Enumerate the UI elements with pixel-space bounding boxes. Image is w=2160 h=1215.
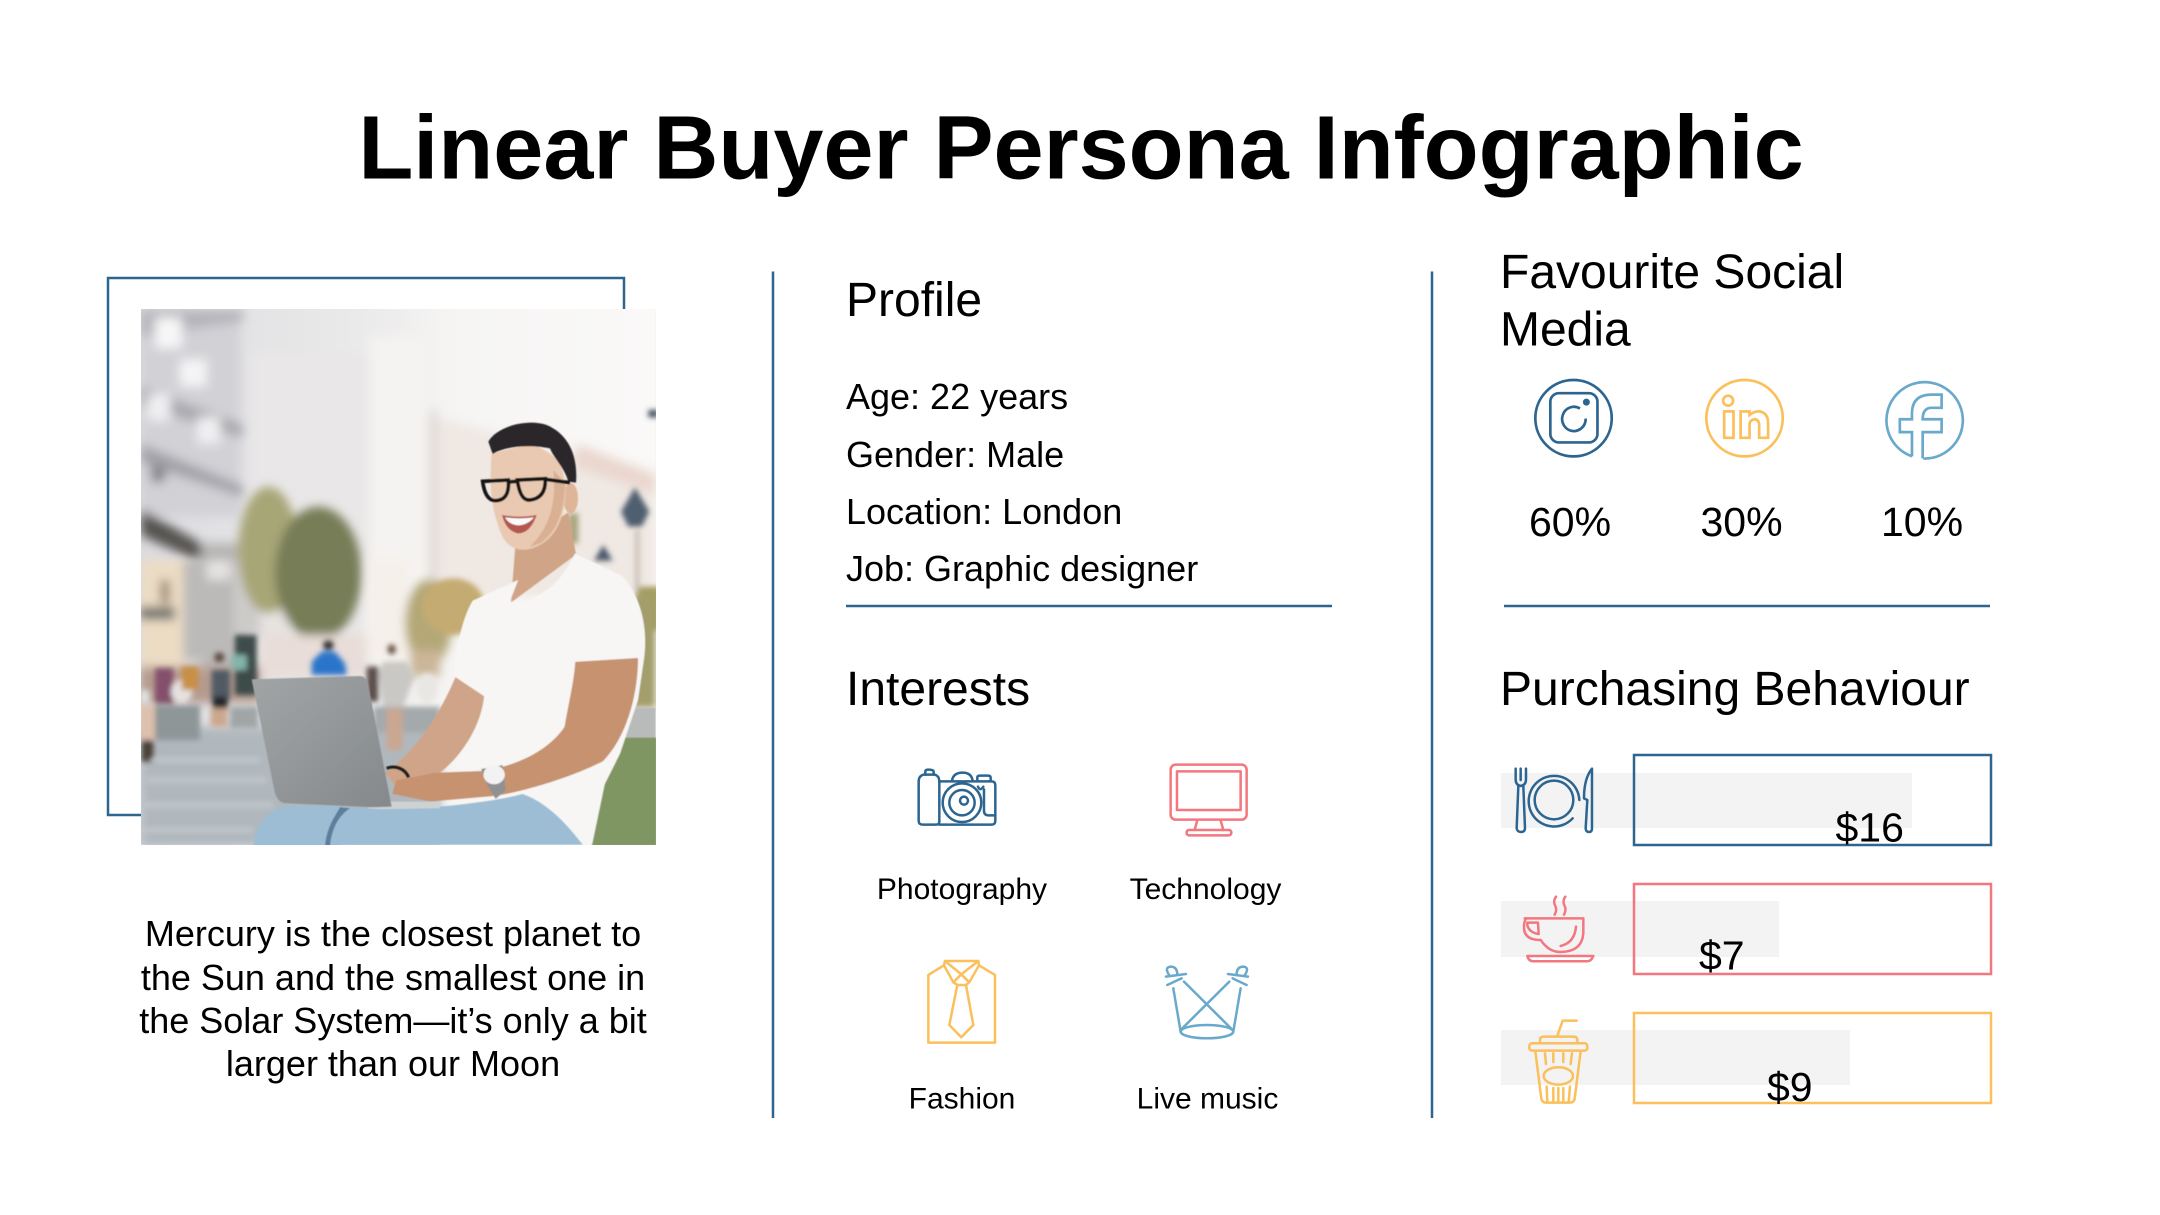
shirt [454,554,645,845]
man head [483,423,578,550]
social media icons [1535,380,1963,459]
icon: takeaway drink [1529,1021,1587,1103]
persona description: larger than our Moon [226,1043,560,1084]
persona description: Mercury is the closest planet to [145,913,641,954]
photo lower street scene [140,487,452,847]
icon: coffee cup [1524,897,1593,961]
title: Linear Buyer Persona Infographic [358,98,1804,198]
icon: linkedin [1706,380,1783,456]
purchasing values: $16 [1836,804,1904,850]
icon: stage lights [1166,967,1248,1038]
icon: instagram [1535,380,1612,456]
photo frame [108,278,624,815]
social media percentages: 60% [1529,499,1611,545]
persona description: the Sun and the smallest one in [141,957,645,998]
icon: monitor [1171,765,1247,835]
watch [481,765,506,799]
purchasing heading: Purchasing Behaviour [1500,663,1970,716]
persona description: the Solar System—it’s only a bit [139,1000,647,1041]
bar: drink [1501,1030,1850,1085]
interests labels: Live music [1137,1082,1278,1116]
profile details: Age: 22 years [846,376,1068,417]
interests labels [877,873,1281,1116]
interests heading: Interests [846,663,1030,716]
profile details: Job: Graphic designer [846,548,1198,589]
persona photo [140,309,660,847]
social media percentages: 10% [1881,499,1963,545]
man body [331,513,656,846]
interests icons [919,765,1248,1043]
near leg [331,794,583,845]
icon: camera [919,770,995,825]
divider right [1431,272,1433,1118]
divider left [772,272,774,1118]
purchasing icons [1516,769,1593,1103]
neck [511,513,576,603]
profile details [846,376,1198,589]
purchasing values [1699,804,1904,1110]
laptop and jeans [252,676,440,847]
purchasing values: $7 [1699,932,1745,978]
near arm [392,658,638,802]
social media heading [1500,246,1844,356]
profile details: Location: London [846,491,1122,532]
far arm [385,677,484,786]
social media heading: Media [1500,304,1631,356]
purchasing bars [1501,755,1991,1103]
icon: facebook [1886,382,1963,459]
persona description [139,913,647,1084]
bar: food [1501,773,1912,828]
interests labels: Photography [877,873,1047,906]
social media percentages: 30% [1700,499,1783,545]
social media percentages [1529,499,1963,545]
icon: plate and cutlery [1516,769,1592,832]
interests labels: Technology [1130,873,1281,906]
profile details: Gender: Male [846,434,1064,475]
bar: coffee [1501,901,1779,957]
profile heading: Profile [846,274,982,327]
interests labels: Fashion [909,1082,1015,1116]
photo right background [422,410,660,635]
social media heading: Favourite Social [1500,246,1844,299]
purchasing values: $9 [1767,1064,1813,1110]
icon: shirt and tie [928,961,995,1043]
